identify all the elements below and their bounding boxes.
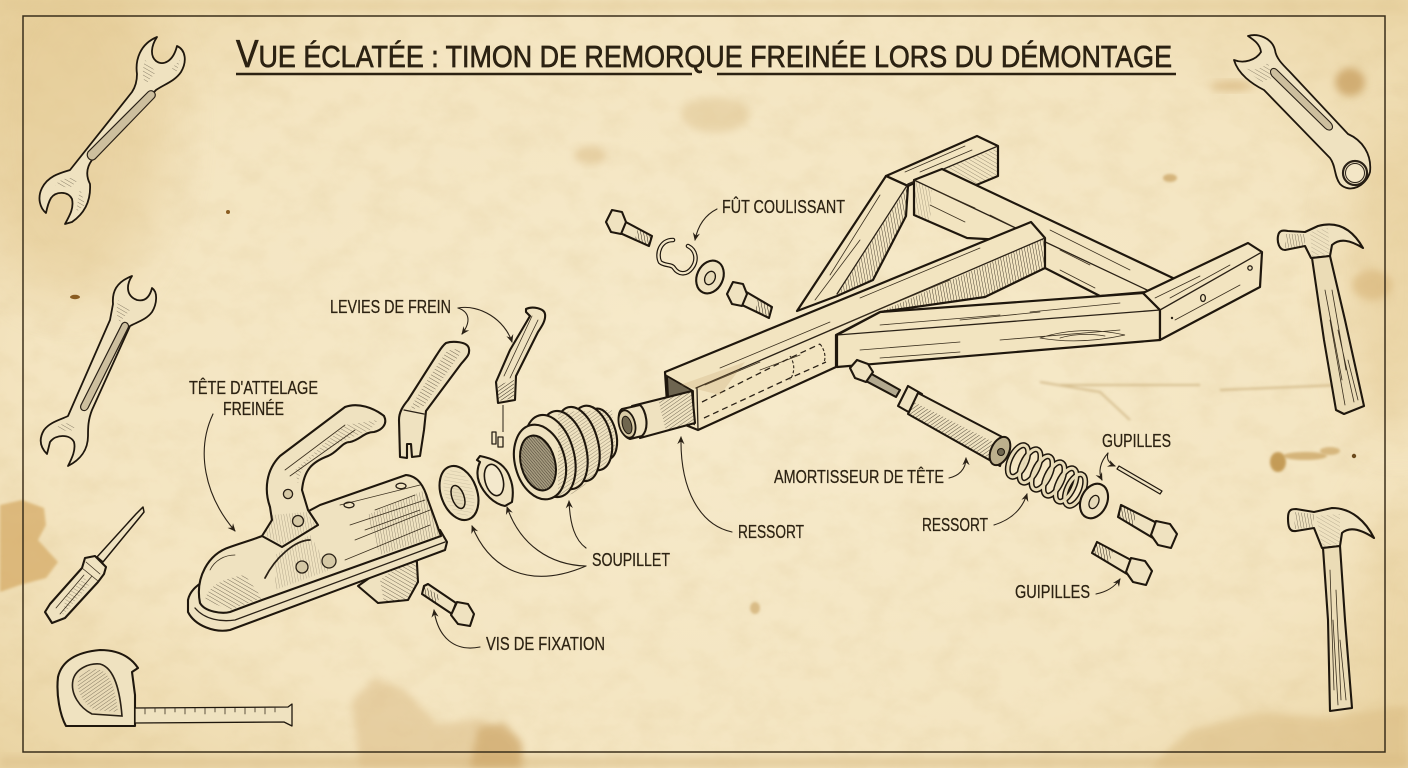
coupling body (199, 475, 441, 613)
label: ressort central: RESSORT (738, 522, 804, 542)
label: tête d'attelage freinée: FREINÉE (223, 399, 284, 419)
arrow: fût coulissant (695, 209, 717, 240)
label: guipilles: GUIPILLES (1015, 582, 1090, 602)
head shock absorber (850, 360, 1014, 468)
sliding barrel shaft (616, 391, 695, 440)
left diagonal strut (797, 176, 908, 311)
label: gupilles: GUPILLES (1102, 431, 1171, 451)
main tube with dashed inner sleeve (665, 222, 1045, 430)
lower horizontal beam (837, 293, 1160, 367)
brake coupling head (188, 405, 447, 631)
icon: screwdriver (45, 507, 144, 623)
label: soupillet: SOUPILLET (592, 550, 670, 570)
rear bolt upper (1118, 505, 1177, 548)
long rear diagonal (914, 169, 1175, 296)
arrow: vis de fixation (434, 610, 480, 648)
arrows: levies de frein (458, 307, 512, 342)
rear washer (1075, 479, 1113, 523)
arrow: ressort arrière (994, 494, 1027, 525)
upper bolt (606, 210, 652, 246)
locking handle (262, 405, 385, 547)
split pin (1117, 466, 1162, 494)
underside block (358, 545, 418, 603)
arrow: guipilles (1096, 579, 1120, 594)
icon: hammer lower right (1288, 508, 1374, 711)
C-clip (659, 240, 695, 273)
rear bolt lower (1092, 542, 1152, 585)
base plate (188, 530, 447, 631)
small washer (691, 256, 729, 298)
icon: wrench middle left (41, 276, 156, 466)
label: ressort arrière: RESSORT (922, 515, 988, 535)
rubber bellows (506, 401, 622, 505)
label: fût coulissant: FÛT COULISSANT (722, 196, 845, 217)
right end block (1143, 243, 1262, 340)
retaining ring (477, 456, 513, 506)
title: VUE ÉCLATÉE : TIMON DE REMORQUE FREINÉE LORS DU DÉMONTAGE (236, 33, 1172, 76)
icon: combination wrench top right (1234, 35, 1370, 188)
arrow: ressort central (681, 437, 732, 532)
large washer (433, 461, 485, 525)
icon: wrench top left (39, 37, 185, 224)
label: vis de fixation: VIS DE FIXATION (486, 634, 605, 654)
label: tête d'attelage freinée (189, 378, 318, 419)
drawbar A-frame (665, 136, 1262, 430)
coupling bolt (422, 584, 474, 626)
arrow: tête d'attelage (204, 414, 235, 531)
arrows: gupilles (1100, 453, 1115, 480)
lower small bolt (727, 282, 772, 318)
back cross member (886, 136, 998, 186)
brake lever left (399, 342, 469, 458)
coupling body shading (195, 483, 445, 621)
label: levies de frein: LEVIES DE FREIN (330, 297, 451, 317)
arrows: soupillet (472, 501, 586, 576)
arrow: amortisseur (949, 458, 966, 478)
icon: tape measure (57, 650, 292, 726)
label: tête d'attelage freinée: TÊTE D'ATTELAGE (189, 378, 318, 398)
icon: hammer upper right (1278, 224, 1364, 414)
label: amortisseur de tête: AMORTISSEUR DE TÊTE (774, 467, 944, 487)
brake lever right with small pins (492, 308, 545, 447)
compression spring (1004, 442, 1089, 509)
